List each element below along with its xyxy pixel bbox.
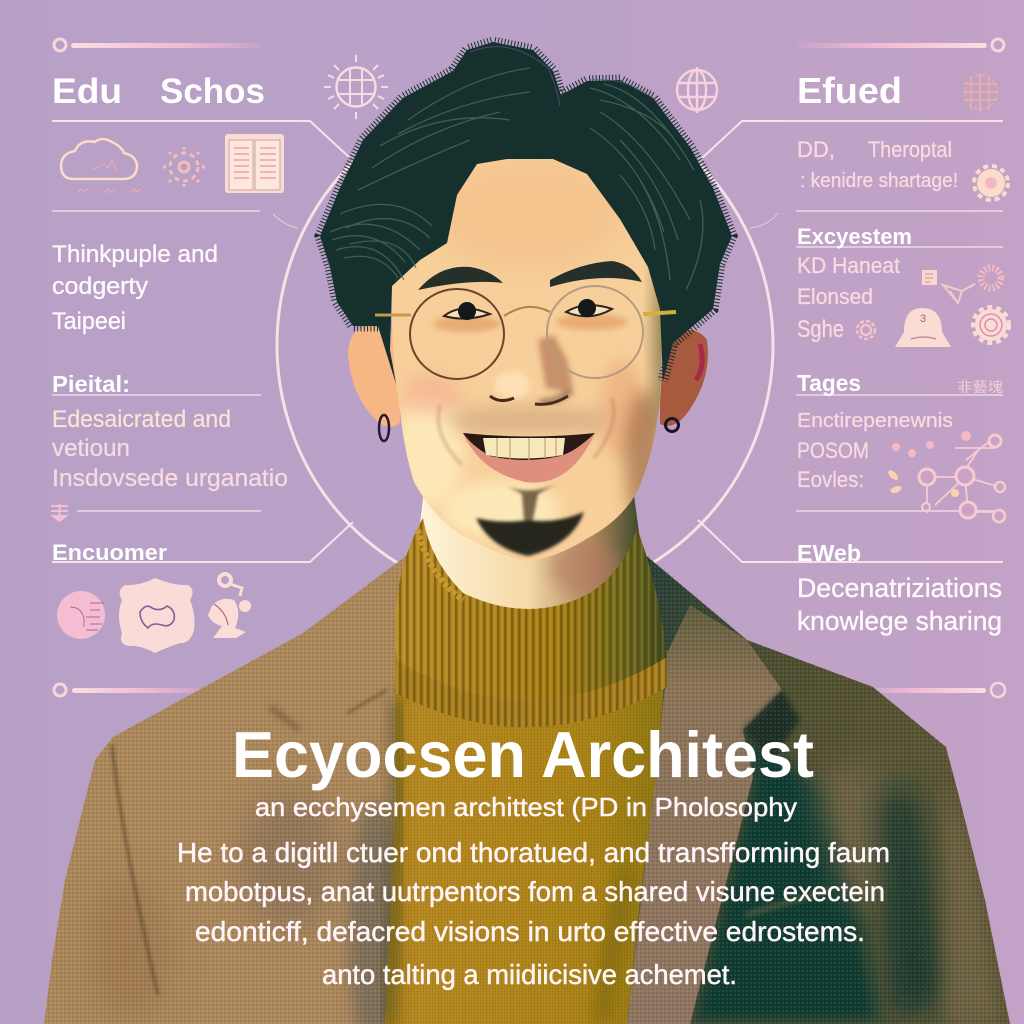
heading: Excyestem: Excyestem — [797, 224, 912, 249]
icon: dotted circle — [981, 268, 1001, 288]
glasses — [375, 286, 676, 379]
title: Ecyocsen Architest — [232, 718, 814, 791]
icon: small ribbon — [51, 504, 68, 521]
label: small glyphs: 非藝塊 — [957, 379, 1003, 395]
subtitle: an ecchysemen archittest (PD in Pholosophy — [255, 792, 797, 822]
text: DD: DD, — [797, 137, 835, 162]
panel: eweb bottom right — [797, 540, 1002, 636]
icon: network gear — [163, 147, 205, 187]
smile lines — [438, 398, 614, 465]
body line 2: mobotpus, anat uutrpentors fom a shared visune exectein — [185, 876, 885, 907]
callout connectors — [52, 121, 1003, 562]
left ear — [348, 326, 400, 427]
text: Elonsed: Elonsed — [797, 284, 873, 309]
jacket — [44, 550, 1010, 1024]
progress bar: top left — [54, 39, 261, 51]
text: Enctirepenewnis: Enctirepenewnis — [797, 410, 953, 432]
text: Eovles: Eovles: — [797, 467, 864, 492]
turtleneck collar — [395, 518, 667, 703]
eyes — [444, 299, 612, 320]
icon: cloud — [61, 139, 141, 193]
icon: dome: 3 — [920, 313, 926, 325]
sweater rib band — [394, 657, 667, 727]
panel: encuomer bottom left — [52, 540, 251, 653]
text: POSOM: POSOM — [797, 438, 869, 463]
icon: paper plane — [943, 284, 975, 303]
panel: title block — [177, 718, 890, 990]
icon: person head with key — [208, 574, 251, 638]
text: Taipei: Taipeei — [52, 308, 126, 335]
sweater — [385, 650, 667, 1024]
panel: tages right middle — [797, 370, 1005, 522]
face — [392, 150, 674, 561]
icon: globe — [677, 67, 717, 113]
heading: Tages: Tages — [797, 370, 861, 396]
body line 3: edonticff, defacred visions in urto effective edrostems. — [195, 916, 865, 947]
icon: small gear — [857, 321, 875, 339]
text: knowlege sharing: knowlege sharing — [797, 606, 1002, 636]
text: vetioun: vetioun — [52, 435, 130, 462]
goatee — [476, 484, 584, 556]
icon: badge with map — [119, 578, 194, 653]
neck — [416, 480, 640, 625]
icon: pink gear — [974, 166, 1008, 200]
heading: Encuomer: Encuomer — [52, 540, 167, 565]
left earring — [379, 415, 389, 441]
icon: network cluster — [888, 431, 1005, 522]
panel: education schools top left — [52, 72, 284, 335]
icon: open book — [225, 134, 284, 193]
text: Thinkpuple and: Thinkpuple and — [52, 241, 218, 268]
panel: digital left middle — [51, 371, 288, 521]
icon: spiral gear — [973, 307, 1009, 343]
nose — [490, 392, 570, 404]
text: Decenatriziations: Decenatriziations — [797, 573, 1002, 603]
right ear — [660, 330, 708, 426]
heading: Efued: Efued — [797, 70, 902, 111]
neck shadow — [549, 542, 621, 594]
heading: EWeb: EWeb — [797, 540, 861, 566]
progress bar: top right — [797, 39, 1004, 51]
text: kenidre shartage: : kenidre shartage! — [800, 170, 958, 192]
text: codgerty: codgerty — [52, 273, 148, 300]
text: Theroptal: Theroptal — [868, 137, 952, 162]
text: Sghe: Sghe — [797, 316, 844, 343]
body line 4: anto talting a miidiicisive achemet. — [322, 959, 737, 990]
panel: top right text — [797, 137, 1008, 200]
text: KD Haneat: KD Haneat — [797, 253, 900, 278]
right earring — [666, 418, 678, 432]
text: Edesaicrated and: Edesaicrated and — [52, 406, 231, 433]
progress bar: bottom left — [54, 684, 202, 696]
heading: Edu: Edu — [52, 72, 122, 111]
icon: sun globe — [324, 55, 388, 119]
portrait ring — [277, 91, 773, 599]
icon: grid globe — [964, 73, 998, 113]
text: Insdovsede urganatio: Insdovsede urganatio — [52, 465, 288, 492]
icon: dome — [895, 308, 951, 347]
mouth — [463, 433, 595, 483]
icon: document — [922, 270, 937, 285]
progress bar: bottom right — [860, 683, 1005, 697]
eyebrows — [418, 261, 642, 290]
panel: ecosystem right — [797, 224, 1009, 347]
body line 1: He to a digitll ctuer ond thoratued, and transfforming faum — [177, 837, 890, 868]
heading: Schos: Schos — [160, 72, 265, 111]
hair — [320, 42, 732, 384]
heading: Pieital: Pieital: — [52, 371, 130, 397]
icon: pink chart circle — [57, 591, 105, 639]
